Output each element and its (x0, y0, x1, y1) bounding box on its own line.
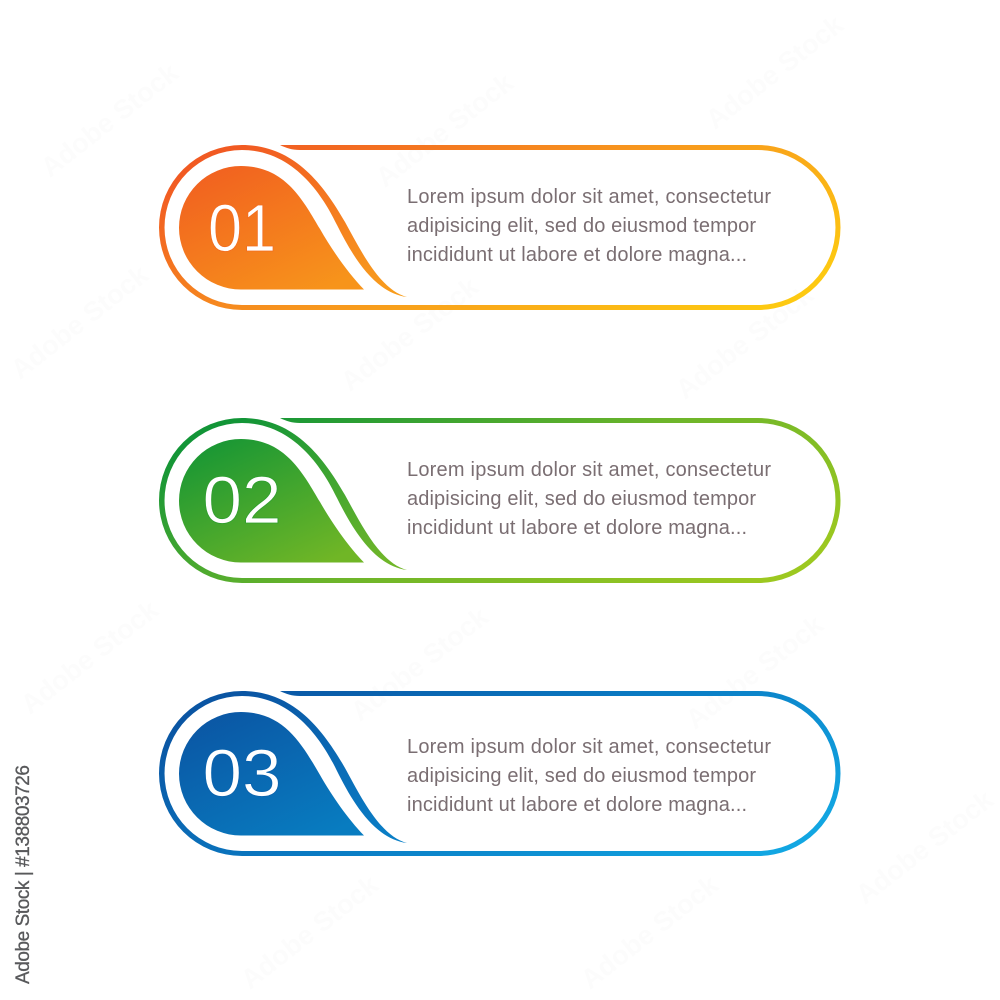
watermark: Adobe Stock (35, 57, 185, 183)
watermark: Adobe Stock (335, 271, 485, 397)
text 01: adipisicing elit, sed do eiusmod tempor (407, 215, 756, 237)
watermark: Adobe Stock (700, 9, 850, 135)
watermark: Adobe Stock (850, 784, 1000, 910)
teardrop 03 (179, 712, 364, 836)
panel: option 02 (159, 418, 840, 583)
text 03: adipisicing elit, sed do eiusmod tempor (407, 765, 756, 787)
number 02: 02 (202, 463, 282, 538)
watermark: Adobe Stock (235, 869, 385, 995)
text 03: incididunt ut labore et dolore magna... (407, 794, 747, 816)
number 01: 01 (208, 191, 276, 266)
text 01: incididunt ut labore et dolore magna... (407, 244, 747, 266)
text 02: incididunt ut labore et dolore magna... (407, 517, 747, 539)
number 03: 03 (202, 736, 282, 811)
panel: option 01 (159, 145, 840, 310)
text 03: Lorem ipsum dolor sit amet, consectetur (407, 736, 771, 758)
teardrop 01 (179, 166, 364, 290)
teardrop 02 (179, 439, 364, 562)
text 03 (407, 736, 771, 816)
text 02: adipisicing elit, sed do eiusmod tempor (407, 488, 756, 510)
text 01: Lorem ipsum dolor sit amet, consectetur (407, 186, 771, 208)
panel outline 02 (159, 418, 840, 583)
watermark: Adobe Stock (575, 869, 725, 995)
watermark: Adobe Stock (680, 609, 830, 735)
stock id caption: Adobe Stock | #138803726 (13, 765, 34, 984)
watermark: Adobe Stock (345, 601, 495, 727)
watermark: Adobe Stock (5, 259, 155, 385)
panel outline 01 (159, 145, 840, 310)
text 01 (407, 186, 771, 266)
watermark: Adobe Stock (670, 279, 820, 405)
panel outline 03 (159, 691, 840, 856)
watermark: Adobe Stock (370, 67, 520, 193)
panel: option 03 (159, 691, 840, 856)
watermark: Adobe Stock (15, 594, 165, 720)
text 02 (407, 459, 771, 539)
text 02: Lorem ipsum dolor sit amet, consectetur (407, 459, 771, 481)
